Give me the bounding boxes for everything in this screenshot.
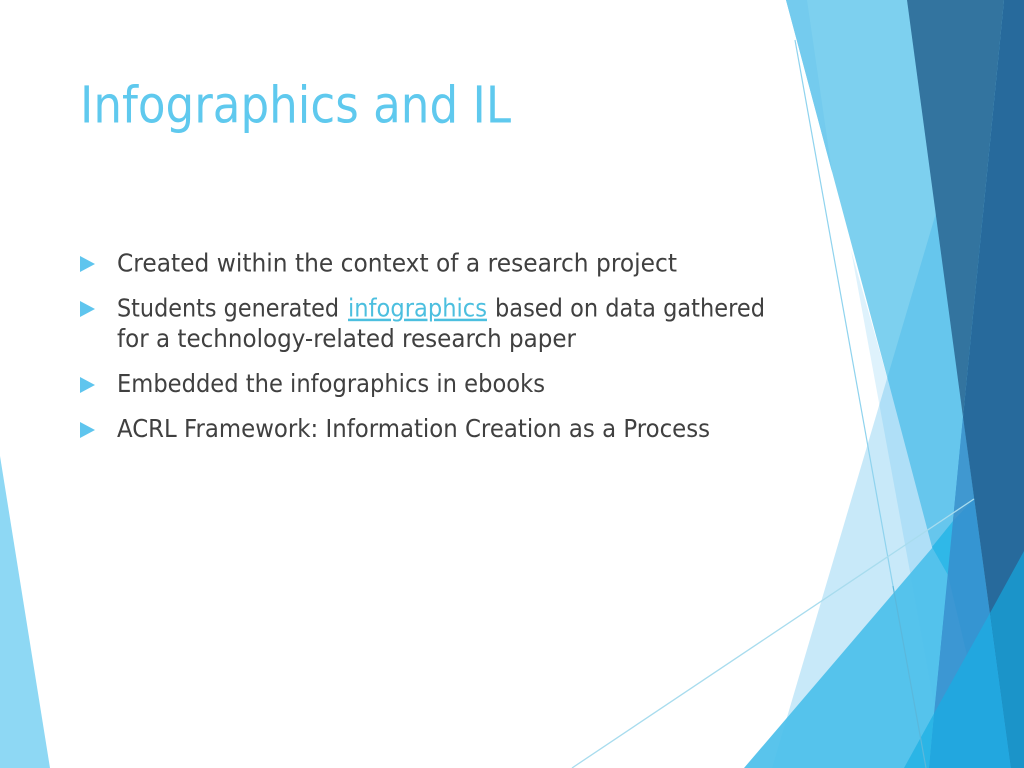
decorative background: left facet bbox=[0, 456, 50, 768]
bullet item: students generated infographics: Students generated bbox=[117, 294, 339, 323]
bullet item: embedded in ebooks: Embedded the infographics in ebooks bbox=[117, 369, 545, 398]
bullet item: students generated infographics: for a technology-related research paper bbox=[117, 324, 577, 353]
bullet item: students generated infographics: based on data gathered bbox=[495, 294, 765, 323]
bullet item: research project context: Created within the context of a research project bbox=[117, 249, 677, 278]
bullet item: ACRL Framework: ACRL Framework: Information Creation as a Process bbox=[117, 414, 710, 443]
bullet item: students generated infographics: infographics bbox=[348, 294, 487, 323]
bullet list bbox=[80, 249, 765, 443]
bullet item: students generated infographics bbox=[80, 294, 765, 353]
title: Infographics and IL bbox=[80, 76, 512, 136]
decorative background: right facets bbox=[572, 0, 1024, 768]
